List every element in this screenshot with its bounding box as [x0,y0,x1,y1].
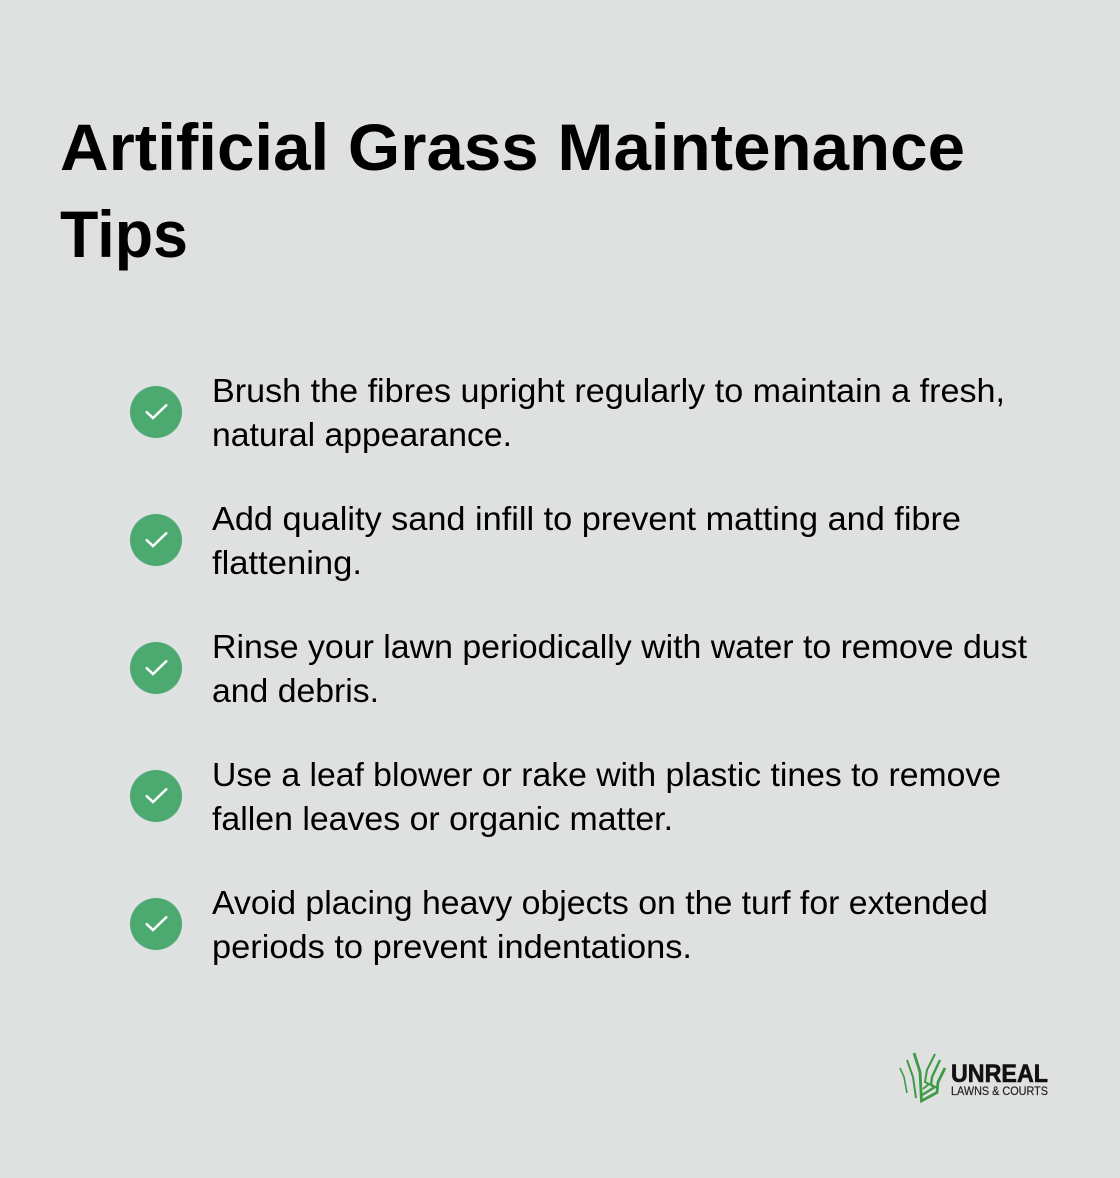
icon: grass blades [900,1053,945,1101]
text: tip 5: Avoid placing heavy objects on the turf for extended [212,884,988,921]
icon: check 3 [130,642,182,694]
text: tip 2: Add quality sand infill to prevent matting and fibre [212,500,961,537]
text: tip 2 [212,500,961,581]
text: tip 5 [212,884,988,965]
icon: check 5 [130,898,182,950]
text: tip 2: flattening. [212,544,362,581]
text: tip 4: fallen leaves or organic matter. [212,800,673,837]
text: tip 3: Rinse your lawn periodically with water to remove dust [212,628,1027,665]
text: tip 4: Use a leaf blower or rake with plastic tines to remove [212,756,1001,793]
text: tip 1 [212,372,1005,453]
icon: check 4 [130,770,182,822]
tip 5 [130,884,988,965]
tip 2 [130,500,961,581]
text: tip 3: and debris. [212,672,379,709]
title: Tips [60,197,188,271]
text: tip 1: Brush the fibres upright regularly to maintain a fresh, [212,372,1005,409]
icon: check 2 [130,514,182,566]
tip 1 [130,372,1005,453]
text: tip 5: periods to prevent indentations. [212,928,692,965]
tip 4 [130,756,1001,837]
title [60,110,965,271]
text: tip 4 [212,756,1001,837]
text: tip 1: natural appearance. [212,416,512,453]
title: Artificial Grass Maintenance [60,110,965,184]
icon: check 1 [130,386,182,438]
logo [900,1053,1048,1101]
text: tip 3 [212,628,1027,709]
logo wordmark: LAWNS & COURTS [951,1086,1048,1098]
logo wordmark: UNREAL [951,1060,1048,1088]
tip 3 [130,628,1027,709]
